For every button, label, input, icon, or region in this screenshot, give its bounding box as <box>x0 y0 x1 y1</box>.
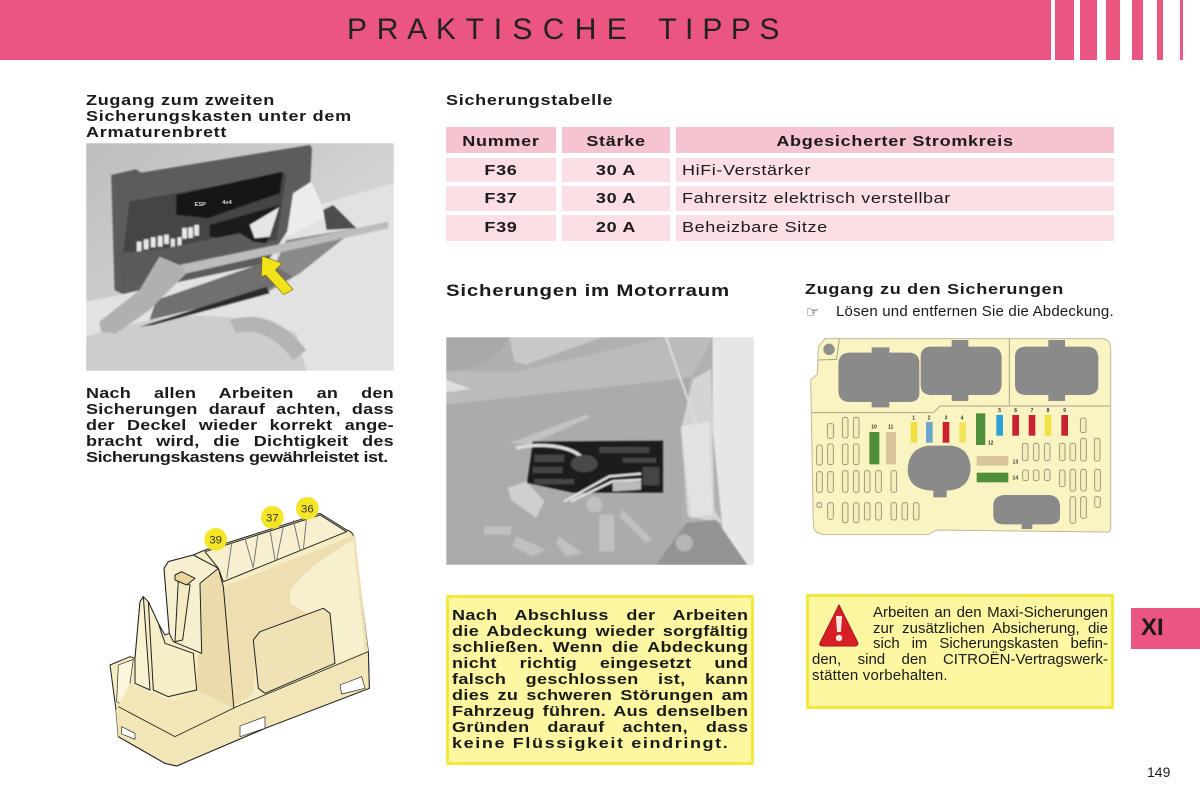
heading: fuse table: Sicherungstabelle <box>446 92 613 109</box>
fuse table: HiFi-Verstärker <box>682 162 811 179</box>
fuse numbers: 13 <box>1013 459 1018 465</box>
chapter tab XI: XI <box>1141 614 1164 641</box>
fuse numbers: 1 <box>912 415 915 421</box>
heading: access to second fuse box <box>86 92 352 141</box>
diagram: fuse box layout <box>810 338 1112 536</box>
fuse table <box>446 127 1114 241</box>
callout: yellow note: Gründen darauf achten, dass <box>452 719 748 736</box>
fuse numbers: 5 <box>998 408 1001 414</box>
fuse table: Beheizbare Sitze <box>682 219 828 236</box>
photo: opened glove box with arrow <box>86 143 394 371</box>
text block: note about closing the cover: Nach allen Arbeiten an den <box>86 385 394 402</box>
text block: note about closing the cover <box>86 385 394 466</box>
illustration: fuse box with fuses 36 37 39 <box>110 497 370 766</box>
fuse numbers: 7 <box>1031 408 1034 414</box>
photo: opened glove box with arrow: 4x4 <box>222 200 233 206</box>
fuse table: Nummer <box>462 133 540 150</box>
illustration: fuse box with fuses 36 37 39: 39 <box>209 534 222 546</box>
callout: warning box <box>806 594 1114 709</box>
heading: access to the fuses: Zugang zu den Sicherungen <box>805 281 1064 298</box>
callout: yellow note: falsch geschlossen ist, kann <box>452 671 748 688</box>
text block: note about closing the cover: Sicherungskastens gewährleistet ist. <box>86 449 388 466</box>
fuse table: F39 <box>484 219 518 236</box>
photo: opened glove box with arrow: ESP <box>195 202 206 208</box>
heading: access to second fuse box: Zugang zum zweiten <box>86 92 275 109</box>
instruction with pointing hand: Lösen und entfernen Sie die Abdeckung. <box>836 303 1114 320</box>
fuse table: 20 A <box>596 219 636 236</box>
fuse table: Abgesicherter Stromkreis <box>776 133 1014 150</box>
warning text <box>812 604 1108 684</box>
callout: yellow note: Fahrzeug führen. Aus denselben <box>452 703 748 720</box>
warning text: zur zusätzlichen Absicherung, die <box>873 620 1108 637</box>
callout: yellow note: keine Flüssigkeit eindringt. <box>452 735 729 752</box>
chapter tab XI <box>1131 608 1200 649</box>
callout: yellow note <box>446 595 754 765</box>
warning text: stätten vorbehalten. <box>812 667 948 684</box>
illustration: fuse box with fuses 36 37 39: 37 <box>266 512 279 524</box>
fuse numbers: 4 <box>961 415 964 421</box>
warning text: sich im Sicherungskasten befin- <box>873 635 1108 652</box>
fuse table: 30 A <box>596 190 636 207</box>
fuse numbers: 14 <box>1013 475 1018 481</box>
fuse table: Stärke <box>586 133 646 150</box>
fuse numbers: 2 <box>928 415 931 421</box>
heading: access to second fuse box: Sicherungskasten unter dem <box>86 108 352 125</box>
callout: yellow note: dies zu schweren Störungen am <box>452 687 748 704</box>
callout: yellow note: Nach Abschluss der Arbeiten <box>452 607 748 624</box>
fuse numbers: 12 <box>988 441 994 447</box>
illustration: fuse box with fuses 36 37 39: 36 <box>301 503 314 515</box>
page number: 149 <box>1147 764 1170 780</box>
text block: note about closing the cover: Sicherungen darauf achten, dass <box>86 401 394 418</box>
fuse table: F37 <box>484 190 518 207</box>
fuse table: Fahrersitz elektrisch verstellbar <box>682 190 951 207</box>
fuse numbers: 6 <box>1014 408 1017 414</box>
text block: note about closing the cover: bracht wird, die Dichtigkeit des <box>86 433 394 450</box>
heading: access to second fuse box: Armaturenbrett <box>86 124 227 141</box>
warning text: den, sind den CITROËN-Vertragswerk- <box>812 651 1108 668</box>
instruction with pointing hand: ☞ <box>806 303 819 321</box>
photo: engine compartment fuse box <box>446 337 754 565</box>
fuses <box>869 413 1068 482</box>
fuse numbers: 8 <box>1047 408 1050 414</box>
header band <box>0 0 1183 60</box>
icon: warning triangle <box>819 604 858 646</box>
callout: yellow note: schließen. Wenn die Abdeckung <box>452 639 748 656</box>
fuse numbers: 10 <box>871 424 877 430</box>
text block: note about closing the cover: der Deckel wieder korrekt ange- <box>86 417 394 434</box>
fuse table: F36 <box>484 162 518 179</box>
fuse numbers: 9 <box>1063 408 1066 414</box>
fuse numbers <box>871 408 1066 481</box>
fuse numbers: 3 <box>945 415 948 421</box>
callout: yellow note: die Abdeckung wieder sorgfältig <box>452 623 748 640</box>
callout: yellow note: nicht richtig eingesetzt und <box>452 655 748 672</box>
heading: fuses in engine compartment: Sicherungen im Motorraum <box>446 281 730 300</box>
warning text: Arbeiten an den Maxi-Sicherungen <box>873 604 1108 621</box>
title: P R A K T I S C H E T I P P S <box>347 13 781 46</box>
fuse numbers: 11 <box>888 424 894 430</box>
fuse table: 30 A <box>596 162 636 179</box>
